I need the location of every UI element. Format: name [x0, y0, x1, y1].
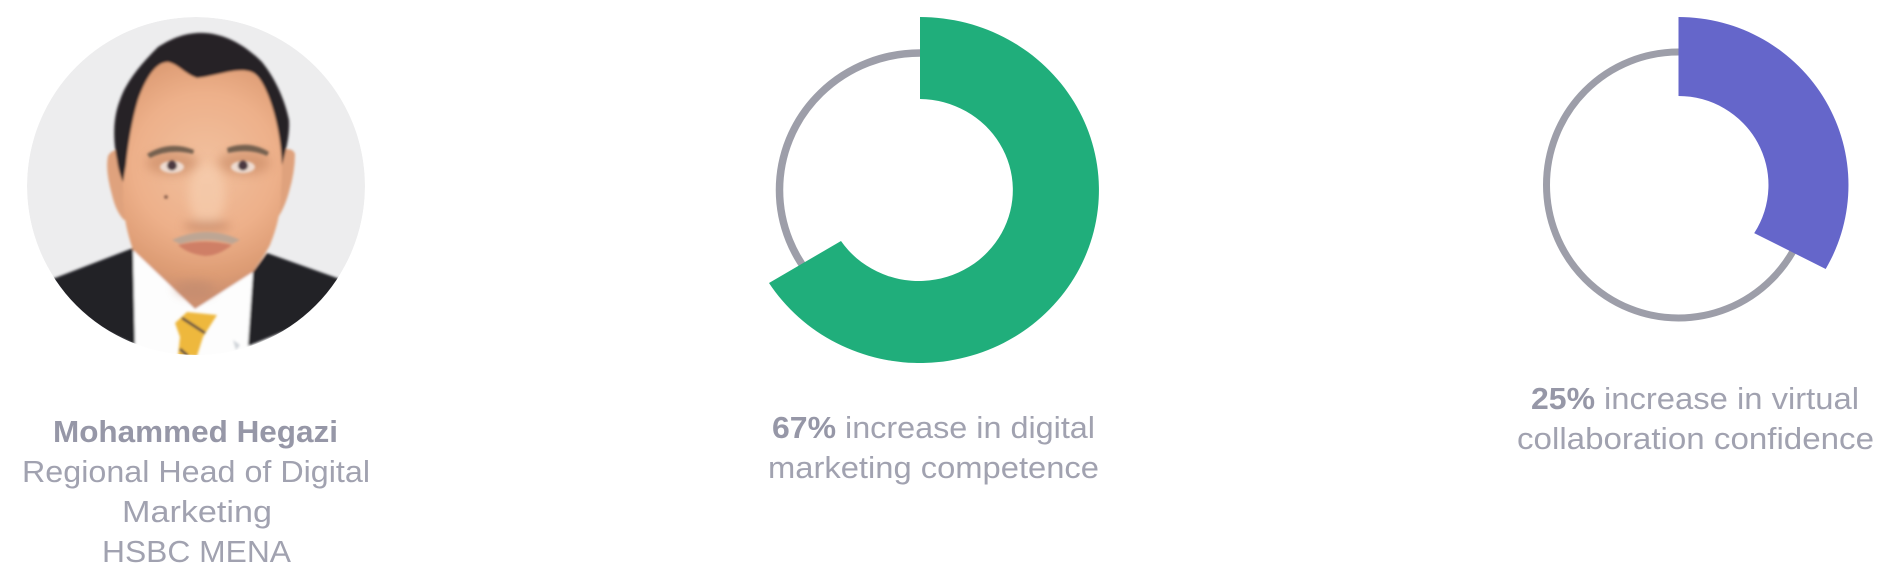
mole [164, 195, 168, 199]
role line 2: Marketing [122, 494, 272, 529]
track ring [780, 53, 1060, 327]
panel: profile [20, 17, 372, 569]
left eyebrow [147, 146, 194, 158]
stat caption [768, 410, 1099, 485]
shirt [133, 248, 253, 360]
caption line 2: marketing competence [768, 450, 1099, 485]
tie stripes [180, 318, 205, 356]
track ring [1546, 52, 1810, 318]
left iris [167, 160, 177, 170]
person illustration [54, 30, 338, 346]
right eye [231, 161, 255, 173]
portrait photo [20, 17, 372, 362]
right eyebrow [227, 145, 269, 156]
green segment [769, 17, 1099, 363]
donut chart: 25% [1546, 17, 1848, 318]
white lower edge of photo [250, 336, 274, 346]
purple segment [1678, 17, 1848, 269]
suit right [246, 252, 338, 346]
right iris [238, 160, 248, 170]
photo background [27, 17, 365, 278]
suit left [54, 246, 136, 344]
panel: digital marketing stat [768, 17, 1099, 485]
eye socket shading [146, 151, 270, 175]
caption line 2: collaboration confidence [1517, 421, 1874, 456]
stat caption [1517, 381, 1874, 456]
percentage: 67% [772, 410, 836, 445]
donut chart: 67% [769, 17, 1099, 363]
lips [178, 242, 232, 256]
panel: virtual collaboration stat [1517, 17, 1874, 456]
role line 1: Regional Head of Digital [22, 454, 370, 489]
left ear [106, 148, 126, 222]
collar shadow [233, 340, 240, 350]
face and neck [123, 58, 282, 309]
moustache [172, 232, 240, 244]
left eye [160, 161, 184, 173]
percentage: 25% [1531, 381, 1595, 416]
caption line 1: increase in virtual [1604, 381, 1859, 416]
name: Mohammed Hegazi [53, 414, 338, 449]
caption line 1: increase in digital [845, 410, 1095, 445]
facial features [146, 145, 270, 356]
tie [175, 312, 217, 356]
right ear [278, 147, 296, 216]
organisation: HSBC MENA [102, 534, 291, 569]
hair [114, 33, 289, 182]
nose and chin shading [175, 165, 231, 296]
